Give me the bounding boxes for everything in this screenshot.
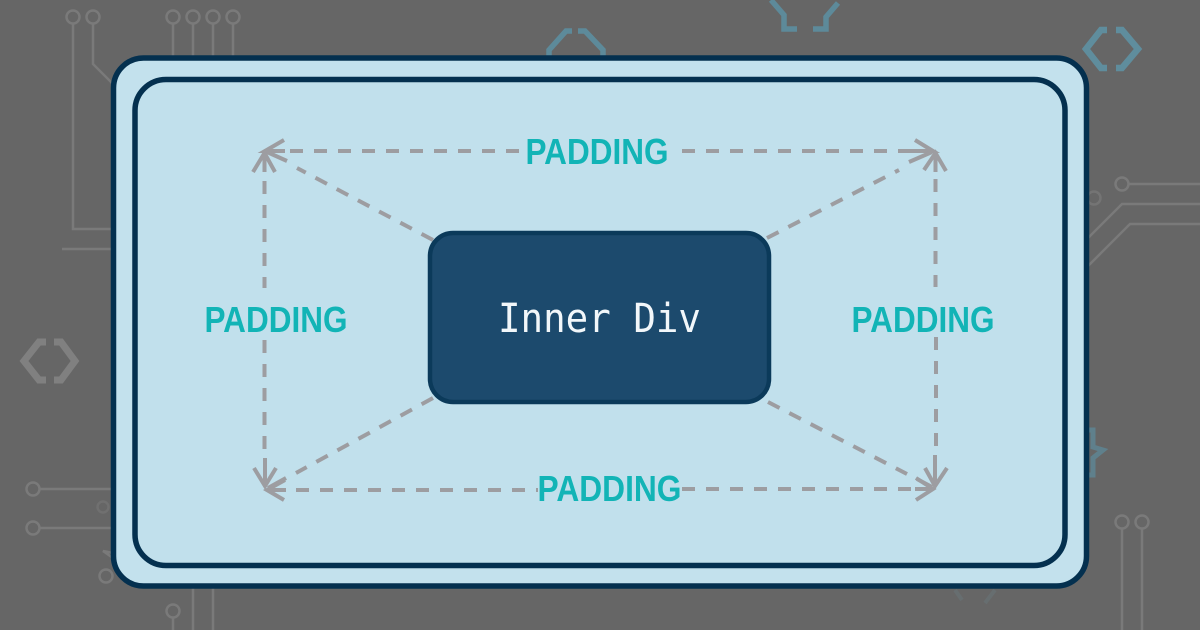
diagonal dashed arrow top right <box>767 152 932 238</box>
icon: code bracket top right centre <box>771 0 838 29</box>
inner div label: Inner Div <box>498 296 701 342</box>
inner div box <box>430 233 769 402</box>
diagonal dashed arrow bottom right <box>768 402 932 487</box>
top dashed arrow <box>265 140 933 151</box>
left dashed arrow <box>253 153 276 486</box>
icon: code bracket top right <box>1086 30 1138 68</box>
panel: outer container <box>114 58 1086 586</box>
bottom dashed arrow <box>267 478 933 500</box>
icon: code bracket bottom partial <box>955 590 995 603</box>
icon: code bracket top centre <box>549 31 603 62</box>
label: left padding: PADDING <box>204 299 348 340</box>
label: bottom padding: PADDING <box>538 468 682 509</box>
diagonal dashed arrow top left <box>267 152 433 240</box>
label: right padding: PADDING <box>852 299 994 340</box>
label: top padding: PADDING <box>526 131 668 172</box>
icon: code bracket left <box>24 342 75 380</box>
icon: code bracket right partial <box>1088 430 1103 475</box>
diagonal dashed arrow bottom left <box>268 398 433 488</box>
panel: outer div content edge <box>135 80 1065 566</box>
right dashed arrow <box>924 153 947 486</box>
